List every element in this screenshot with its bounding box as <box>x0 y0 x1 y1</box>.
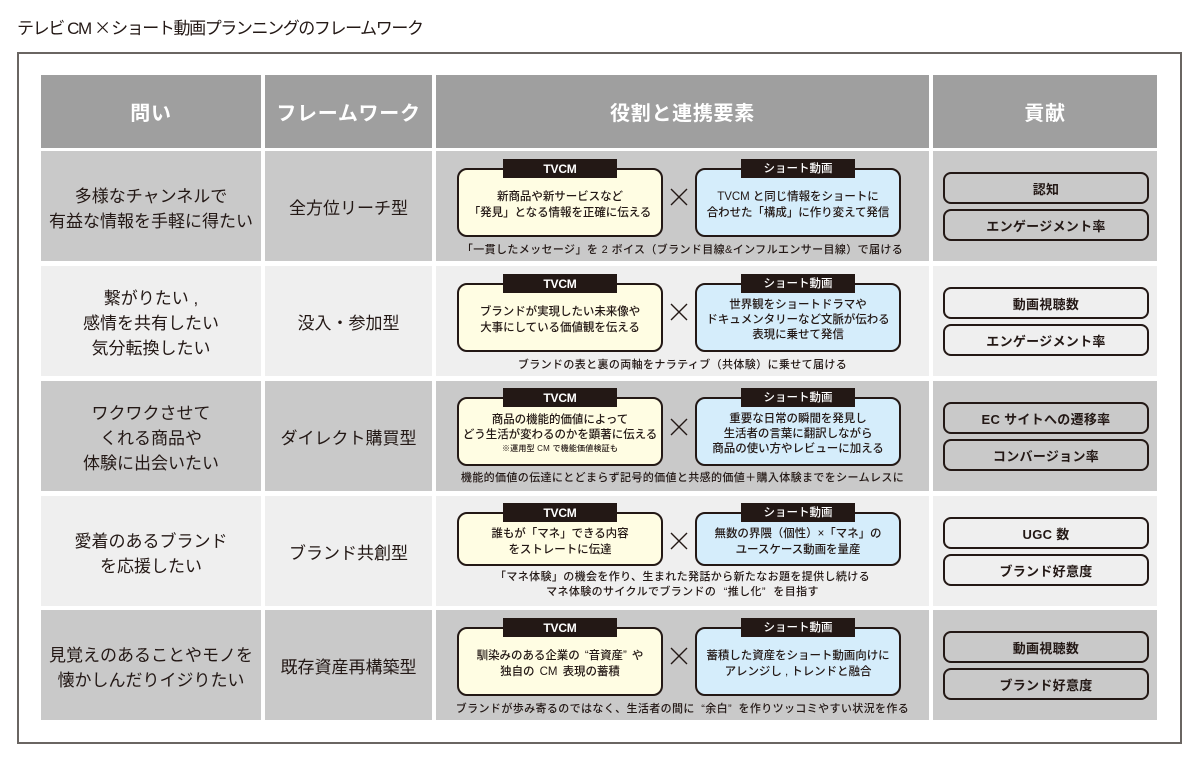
metric: ブランド好意度 <box>999 678 1093 692</box>
question <box>41 496 261 606</box>
caption: 機能的価値の伝達にとどまらず記号的価値と共感的価値＋購入体験までをシームレスに <box>461 472 904 484</box>
metric <box>943 287 1149 319</box>
metric: 動画視聴数 <box>1013 296 1079 312</box>
short video box: ユースケース動画を量産 <box>736 544 860 556</box>
caption: ブランドが歩み寄るのではなく、生活者の間に “余白” を作りツッコミやすい状況を作る <box>456 703 909 715</box>
metric: エンゲージメント率 <box>986 334 1106 348</box>
TVCM tab: TVCM <box>543 277 577 291</box>
TVCM box: 独自の CM 表現の蓄積 <box>500 666 620 678</box>
TVCM tab <box>503 388 617 407</box>
icon: multiply <box>670 648 688 664</box>
role panel <box>436 151 929 261</box>
TVCM box: どう生活が変わるのかを顕著に伝える <box>463 429 657 441</box>
row 1: 全方位リーチ型 <box>41 151 1157 261</box>
short video box: 表現に乗せて発信 <box>752 328 844 340</box>
header: 役割と連携要素: 役割と連携要素 <box>610 103 755 125</box>
contribution panel <box>933 610 1157 720</box>
short video box: 世界観をショートドラマや <box>729 298 867 310</box>
short video box <box>695 283 901 352</box>
icon: multiply <box>670 418 688 436</box>
framework name: 没入・参加型 <box>298 314 400 332</box>
header: 問い <box>41 75 261 148</box>
header: フレームワーク: フレームワーク <box>276 103 421 125</box>
question: 繋がりたい , <box>104 289 198 308</box>
TVCM box: をストレートに伝達 <box>508 544 612 556</box>
TVCM box: 商品の機能的価値によって <box>492 414 628 426</box>
TVCM tab <box>503 503 617 522</box>
metric <box>943 172 1149 204</box>
short video tab <box>741 618 855 637</box>
short video box <box>695 397 901 466</box>
question: 見覚えのあることやモノを <box>49 646 253 664</box>
role panel <box>436 610 929 720</box>
row 4: ブランド共創型 <box>41 496 1157 606</box>
row 2: 没入・参加型 <box>41 266 1157 376</box>
TVCM tab <box>503 618 617 637</box>
short video box: 無数の界隈（個性）×「マネ」の <box>715 528 881 540</box>
metric: エンゲージメント率 <box>986 218 1106 234</box>
icon: multiply <box>670 532 688 550</box>
short video tab: ショート動画 <box>764 163 832 175</box>
icon: multiply <box>670 188 688 206</box>
metric <box>943 554 1149 586</box>
TVCM tab: TVCM <box>543 162 577 176</box>
framework name <box>265 610 432 720</box>
question <box>41 151 261 261</box>
short video tab: ショート動画 <box>764 507 832 519</box>
header: 問い: 問い <box>130 103 172 125</box>
contribution panel <box>933 266 1157 376</box>
header: 貢献: 貢献 <box>1024 103 1066 125</box>
question: 感情を共有したい <box>83 314 219 333</box>
TVCM box: ※運用型 CM で機能価値検証も <box>502 444 618 453</box>
framework name: ダイレクト購買型 <box>280 428 416 448</box>
header: 貢献 <box>933 75 1157 148</box>
short video tab: ショート動画 <box>764 392 832 404</box>
question: くれる商品や <box>100 429 202 448</box>
metric: UGC 数 <box>1022 526 1070 542</box>
short video tab: ショート動画 <box>764 278 832 290</box>
icon: multiply <box>670 304 688 320</box>
TVCM tab <box>503 159 617 178</box>
short video tab <box>741 274 855 293</box>
question <box>41 266 261 376</box>
metric <box>943 324 1149 356</box>
row 3: ダイレクト購買型 <box>41 381 1157 491</box>
TVCM tab: TVCM <box>543 506 577 520</box>
short video tab <box>741 159 855 178</box>
metric: EC サイトへの遷移率 <box>982 412 1110 426</box>
title: テレビ CM ×ショート動画プランニングのフレームワーク <box>17 14 423 39</box>
TVCM box: 新商品や新サービスなど <box>497 191 623 203</box>
framework name: ブランド共創型 <box>289 544 408 562</box>
short video tab <box>741 503 855 522</box>
metric <box>943 517 1149 549</box>
short video box: 商品の使い方やレビューに加える <box>712 442 884 454</box>
framework name <box>265 266 432 376</box>
role panel <box>436 496 929 606</box>
TVCM box <box>457 512 663 566</box>
question: 気分転換したい <box>92 339 210 358</box>
contribution panel <box>933 151 1157 261</box>
role panel <box>436 381 929 491</box>
TVCM box: ブランドが実現したい未来像や <box>480 306 640 318</box>
short video box: 合わせた「構成」に作り変えて発信 <box>707 207 889 219</box>
contribution panel <box>933 496 1157 606</box>
metric <box>943 209 1149 241</box>
caption <box>495 570 870 598</box>
TVCM box: 馴染みのある企業の “音資産” や <box>477 650 643 662</box>
question <box>41 381 261 491</box>
question: 体験に出会いたい <box>83 454 219 473</box>
TVCM box <box>457 627 663 696</box>
short video box: TVCM と同じ情報をショートに <box>717 191 879 203</box>
short video box <box>695 627 901 696</box>
role panel <box>436 266 929 376</box>
framework name: 全方位リーチ型 <box>289 198 408 218</box>
question: ワクワクさせて <box>92 404 210 423</box>
metric <box>943 439 1149 471</box>
metric: コンバージョン率 <box>993 448 1099 464</box>
short video box <box>695 512 901 566</box>
short video box: アレンジし , トレンドと融合 <box>725 666 871 678</box>
metric: 動画視聴数 <box>1013 640 1079 656</box>
TVCM box: 大事にしている価値観を伝える <box>480 322 640 334</box>
question <box>41 610 261 720</box>
caption: マネ体験のサイクルでブランドの “推し化” を目指す <box>546 586 819 598</box>
caption: ブランドの表と裏の両軸をナラティブ（共体験）に乗せて届ける <box>518 359 847 371</box>
metric <box>943 631 1149 663</box>
short video box: ドキュメンタリーなど文脈が伝わる <box>706 314 890 326</box>
framework name <box>265 151 432 261</box>
framework name <box>265 496 432 606</box>
caption: 「マネ体験」の機会を作り、生まれた発話から新たなお題を提供し続ける <box>495 571 870 583</box>
question: を応援したい <box>100 556 202 576</box>
metric: 認知 <box>1033 182 1059 196</box>
caption: 「一貫したメッセージ」を 2 ボイス（ブランド目線&インフルエンサー目線）で届ける <box>462 244 903 256</box>
TVCM box <box>457 397 663 466</box>
TVCM box <box>457 168 663 237</box>
header: フレームワーク <box>265 75 432 148</box>
question: 愛着のあるブランド <box>74 532 228 550</box>
TVCM box: 誰もが「マネ」できる内容 <box>491 528 629 540</box>
framework name: 既存資産再構築型 <box>280 658 416 676</box>
framework name <box>265 381 432 491</box>
metric <box>943 402 1149 434</box>
short video tab <box>741 388 855 407</box>
short video tab: ショート動画 <box>764 622 832 634</box>
row 5: 既存資産再構築型 <box>41 610 1157 720</box>
contribution panel <box>933 381 1157 491</box>
short video box: 生活者の言葉に翻訳しながら <box>724 428 872 440</box>
short video box: 重要な日常の瞬間を発見し <box>729 412 867 424</box>
question: 多様なチャンネルで <box>75 186 227 206</box>
TVCM tab: TVCM <box>543 621 577 635</box>
metric: ブランド好意度 <box>999 564 1093 578</box>
header: 役割と連携要素 <box>436 75 929 148</box>
TVCM box: 「発見」となる情報を正確に伝える <box>469 207 651 219</box>
short video box <box>695 168 901 237</box>
short video box: 蓄積した資産をショート動画向けに <box>706 650 890 662</box>
TVCM tab <box>503 274 617 293</box>
metric <box>943 668 1149 700</box>
question: 有益な情報を手軽に得たい <box>49 212 253 230</box>
TVCM box <box>457 283 663 352</box>
TVCM tab: TVCM <box>543 391 577 405</box>
question: 懐かしんだりイジりたい <box>58 670 244 690</box>
